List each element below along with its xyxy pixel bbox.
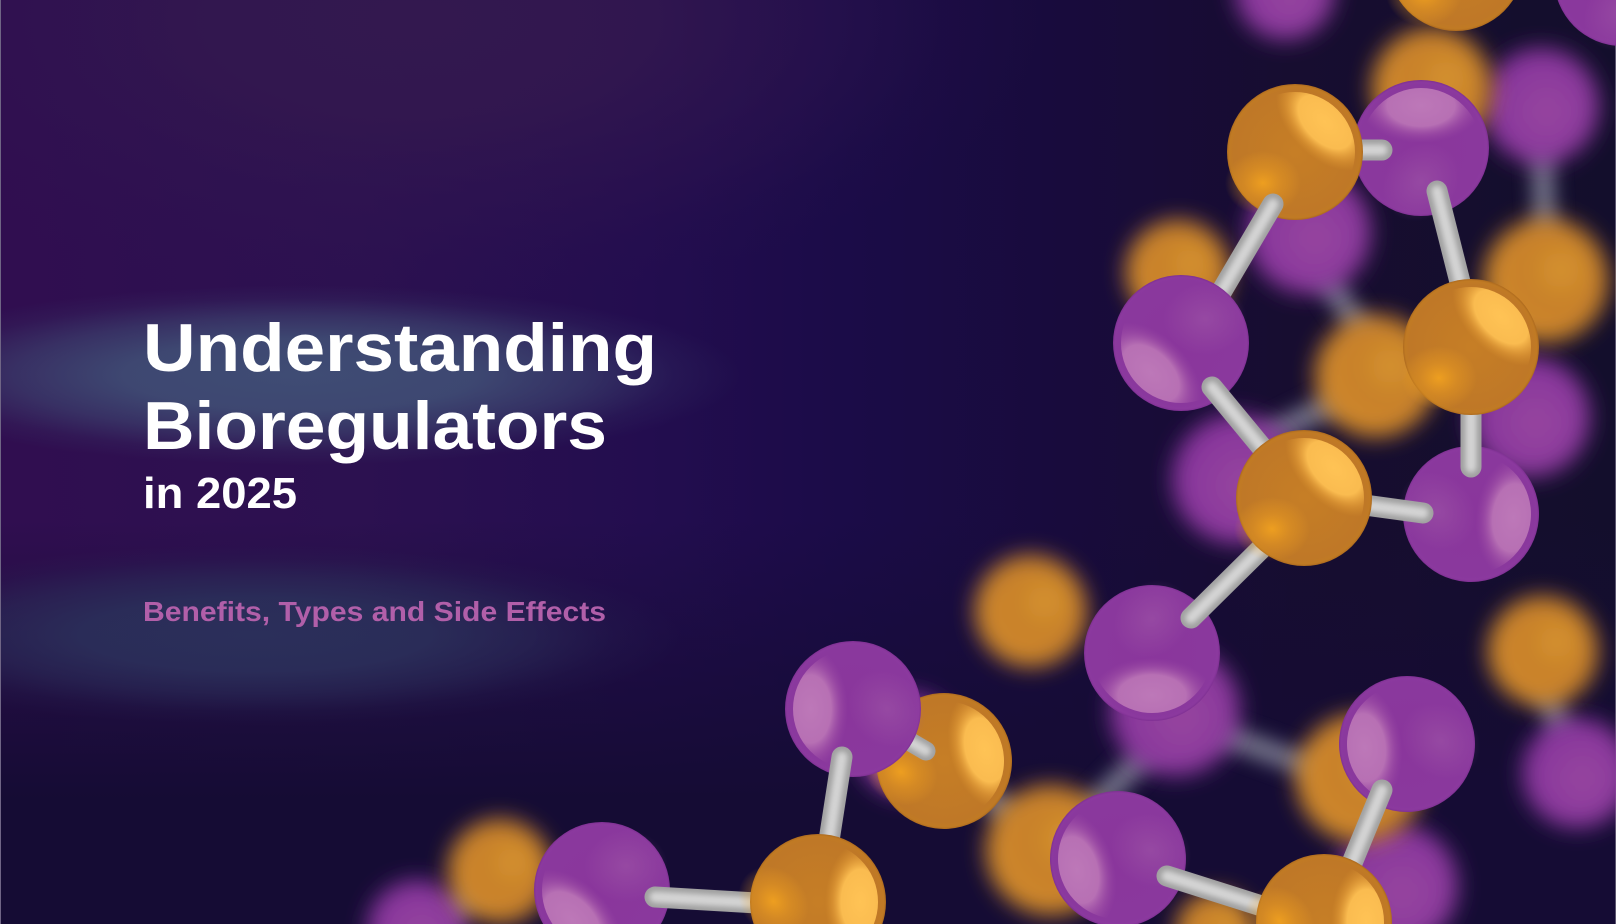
atom: purple right lower (1375, 418, 1567, 610)
atom: purple bottom left (534, 822, 670, 924)
bond: horizontal (655, 897, 790, 905)
bond: top orange to left purple (1220, 204, 1273, 294)
atom: purple right (1311, 648, 1503, 840)
bond: right orange to purple (1460, 400, 1482, 467)
blurred bonds (440, 130, 1565, 920)
title line 3: in 2025 (143, 469, 297, 518)
title (143, 310, 657, 518)
molecule: lower left sharp chain (534, 613, 1037, 924)
bond: right (1345, 790, 1382, 880)
atom: orange back (849, 667, 1037, 854)
atom: purple top (757, 613, 949, 805)
bond: short stub (890, 730, 926, 751)
atom: orange bottom (720, 804, 914, 924)
atom: orange right (1401, 279, 1539, 415)
bond: left purple to centre orange (1212, 387, 1264, 450)
atom: orange top edge (1386, 0, 1524, 31)
bond: centre orange to lower purple (1191, 540, 1270, 618)
atom: purple top (1325, 52, 1517, 244)
molecule: upper sharp ring (1056, 52, 1567, 749)
atom: purple bottom (1025, 766, 1211, 924)
subtitle: Benefits, Types and Side Effects (143, 596, 606, 627)
atom: orange centre (1234, 430, 1372, 566)
bond: upper (826, 757, 842, 860)
title line 1: Understanding (143, 310, 657, 386)
molecule: top edge atoms (1386, 0, 1616, 74)
atom: orange top (1225, 84, 1363, 220)
bond: top purple to right orange (1437, 191, 1462, 290)
blurred orange spheres (448, 28, 1608, 924)
atom: purple centre (1056, 557, 1248, 749)
molecule: blurred background layer (367, 0, 1616, 924)
bond: top pair (1350, 140, 1382, 160)
atom: orange bottom (1226, 824, 1420, 924)
atom: purple left (1113, 275, 1249, 411)
bond: centre orange to right purple (1350, 503, 1423, 513)
atom: purple top right corner (1526, 0, 1616, 74)
title line 2: Bioregulators (143, 388, 607, 464)
bond: left (1167, 876, 1290, 915)
blurred purple spheres (367, 0, 1616, 924)
molecule: lower right sharp chain (1025, 648, 1503, 924)
